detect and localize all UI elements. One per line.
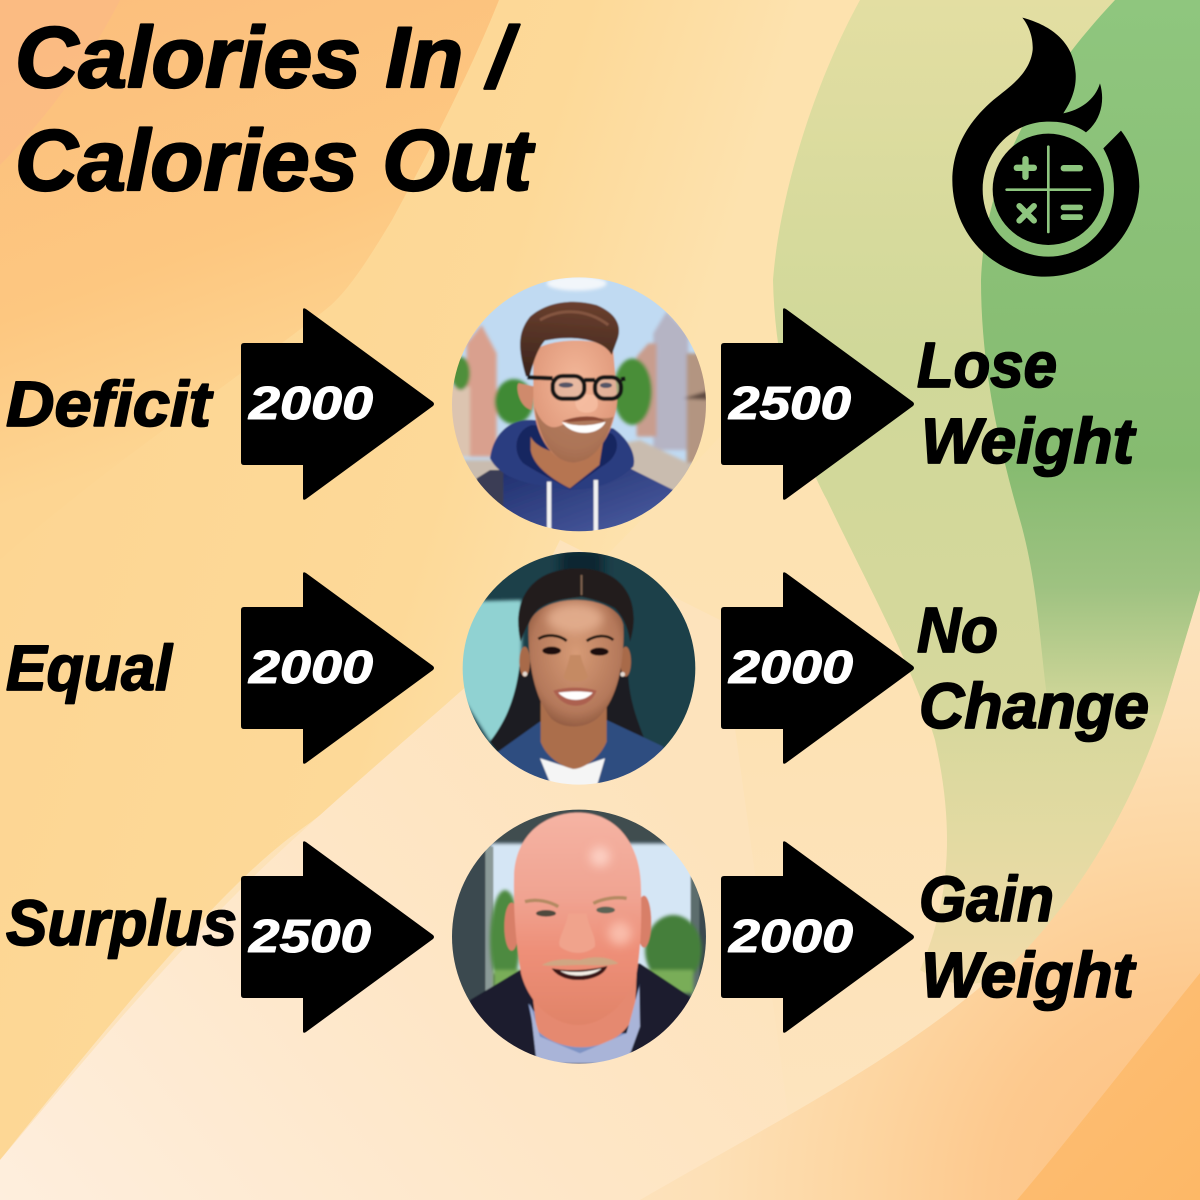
arrow: calories in 2000: 2000	[248, 377, 373, 429]
arrow: calories in 2500	[241, 841, 434, 1033]
arrow: calories out 2500	[721, 308, 914, 500]
arrow: calories in 2000	[241, 572, 434, 764]
arrow: calories out 2000	[721, 572, 914, 764]
outcome: No Change: Change	[919, 670, 1149, 742]
title	[15, 10, 535, 209]
outcome: No Change	[917, 594, 1149, 742]
row: surplus	[6, 803, 1137, 1070]
title: Calories Out	[15, 113, 535, 209]
outcome: Lose Weight: Lose	[917, 329, 1057, 401]
title: Calories In /	[15, 10, 520, 106]
arrow: calories out 2000: 2000	[728, 641, 853, 693]
row: equal	[6, 548, 1149, 792]
outcome: No Change: No	[917, 594, 998, 666]
arrow: calories in 2000: 2000	[248, 641, 373, 693]
outcome: Gain Weight	[919, 863, 1137, 1011]
arrow: calories in 2500: 2500	[248, 910, 371, 962]
outcome: Gain Weight: Gain	[919, 863, 1054, 935]
portrait: young man with glasses	[447, 273, 713, 537]
outcome: Gain Weight: Weight	[921, 939, 1137, 1011]
label: Deficit: Deficit	[6, 368, 214, 440]
row: deficit	[6, 273, 1137, 537]
outcome: Lose Weight	[917, 329, 1137, 477]
icon: flame with calculator	[952, 18, 1139, 277]
portrait: bald man	[447, 803, 713, 1070]
label: Surplus: Surplus	[6, 887, 237, 959]
portrait: young woman	[457, 548, 703, 792]
arrow: calories out 2000	[721, 841, 914, 1033]
label: Equal: Equal	[6, 632, 173, 704]
outcome: Lose Weight: Weight	[921, 405, 1137, 477]
arrow: calories in 2000	[241, 308, 434, 500]
arrow: calories out 2500: 2500	[728, 377, 851, 429]
arrow: calories out 2000: 2000	[728, 910, 853, 962]
